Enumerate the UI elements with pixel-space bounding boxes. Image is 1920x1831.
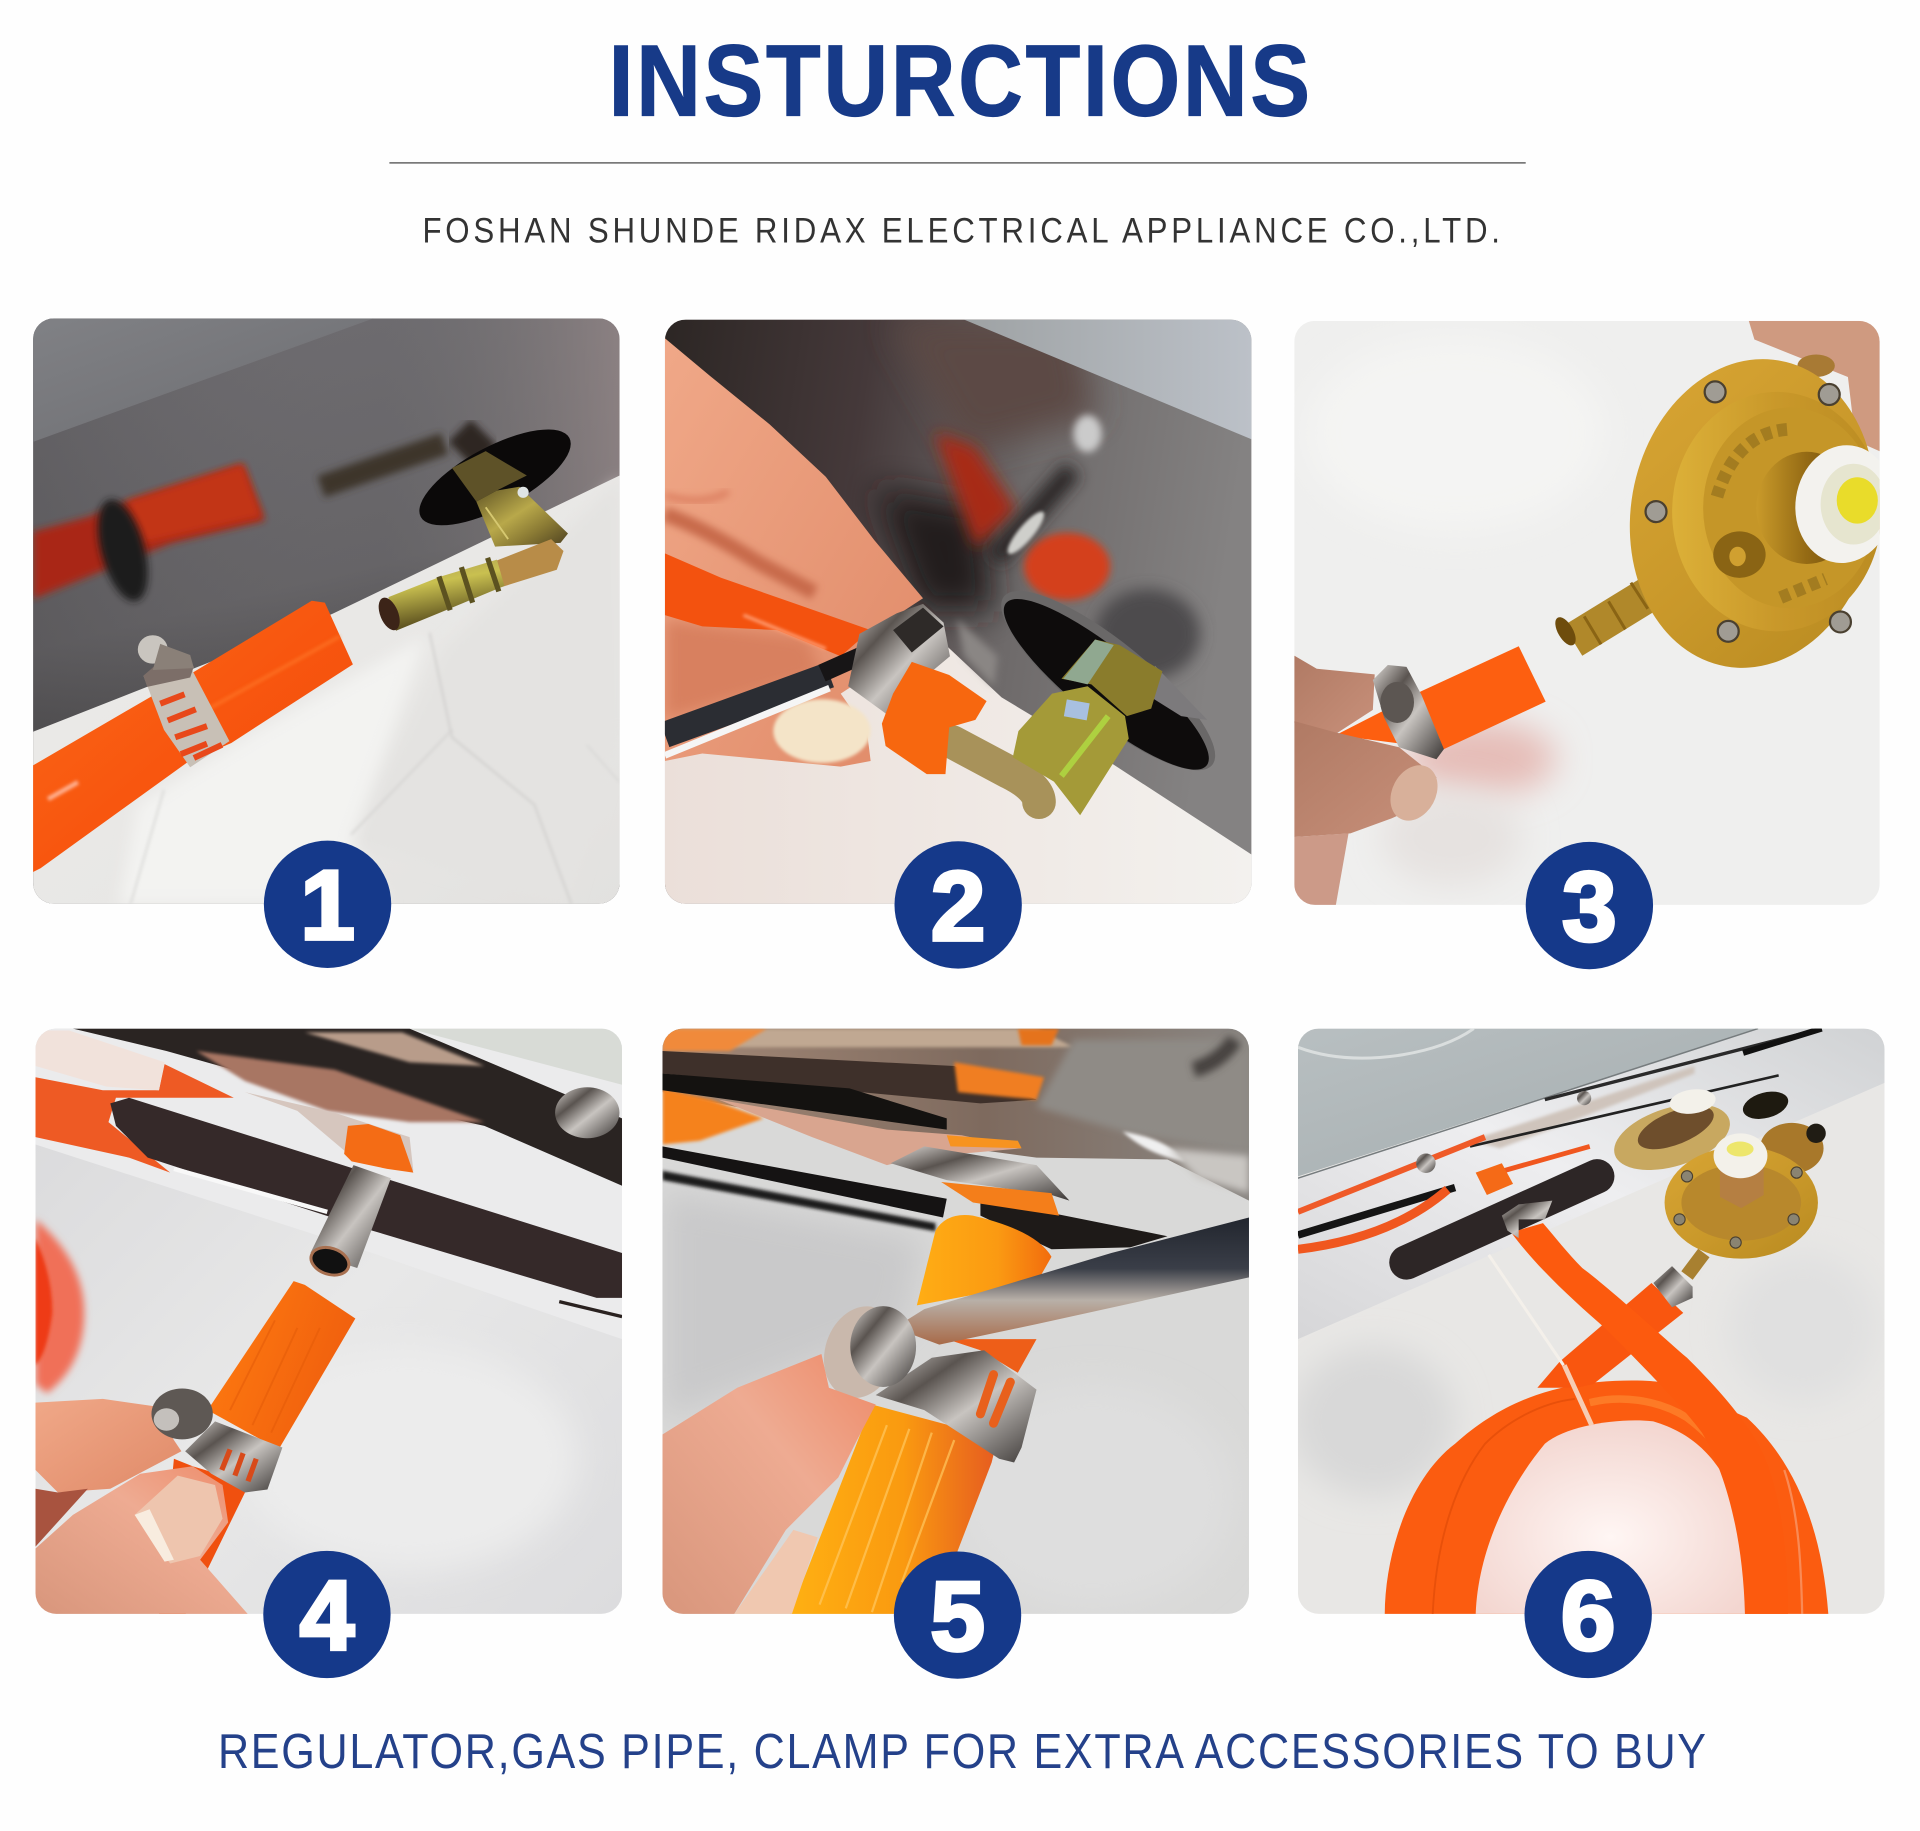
metal pipe xyxy=(307,1165,391,1280)
badge: number 5: 5 xyxy=(930,1561,985,1671)
regulator white cap xyxy=(1788,439,1901,569)
panel: step 2 photo xyxy=(665,320,1251,906)
hose upper xyxy=(917,1215,1051,1305)
gold fitting xyxy=(953,639,1162,815)
hose lower xyxy=(790,1405,996,1615)
badge: number 4: 4 xyxy=(300,1560,354,1670)
cooktop xyxy=(1298,1029,1758,1176)
orange reflection xyxy=(662,1029,767,1051)
orange reflection xyxy=(36,1064,234,1173)
stainless plate xyxy=(1298,1029,1885,1339)
badge: number 1 xyxy=(264,841,391,968)
plate bolts xyxy=(1416,1154,1436,1173)
regulator flame emblem xyxy=(1713,531,1766,578)
orange cap xyxy=(344,1124,413,1173)
front regulator xyxy=(1665,1123,1826,1259)
hose B xyxy=(1537,1283,1683,1388)
lower hose xyxy=(159,1459,245,1615)
footer note: REGULATOR,GAS PIPE, CLAMP FOR EXTRA ACCESSORIES TO BUY xyxy=(218,1724,1706,1779)
panel: step 4 photo xyxy=(36,1029,622,1615)
title: INSTURCTIONS xyxy=(609,24,1310,138)
badge: number 1: 1 xyxy=(300,850,355,960)
black slot strips xyxy=(662,1146,947,1217)
clamp xyxy=(812,1297,1037,1463)
orange ring left xyxy=(36,1219,84,1393)
orange reflections xyxy=(1298,1137,1485,1212)
hand xyxy=(665,338,923,767)
nozzle xyxy=(1687,1253,1704,1275)
black slot xyxy=(1002,592,1216,770)
badge: number 5 xyxy=(894,1551,1021,1679)
panel: step 1 photo xyxy=(33,318,620,905)
elbow fitting xyxy=(374,451,568,633)
orange hose tip xyxy=(208,1281,355,1449)
badge: number 2: 2 xyxy=(931,851,985,961)
hose A xyxy=(1511,1223,1788,1615)
orange hose xyxy=(665,553,871,656)
panel: step 6 photo xyxy=(1290,1029,1885,1615)
panel: step 3 photo xyxy=(1294,321,1901,907)
clamp xyxy=(151,1388,282,1492)
chrome reflection bands xyxy=(73,1029,622,1186)
hand top right xyxy=(1749,321,1881,452)
hand xyxy=(1294,656,1447,907)
panel: step 5 photo xyxy=(662,1029,1249,1615)
clear zip tie xyxy=(1489,1255,1592,1425)
badge: number 3 xyxy=(1526,842,1653,969)
finger xyxy=(36,1399,181,1492)
cloth surface xyxy=(33,475,620,905)
clamps xyxy=(1502,1201,1693,1307)
small orange cap xyxy=(1476,1163,1513,1195)
clamp xyxy=(1373,665,1444,759)
hand xyxy=(662,1354,876,1615)
coiled hose ring xyxy=(1385,1381,1828,1615)
screwdriver xyxy=(665,643,889,755)
company subtitle: FOSHAN SHUNDE RIDAX ELECTRICAL APPLIANCE CO.,LTD. xyxy=(422,212,1500,251)
regulator embossed band xyxy=(1717,429,1788,497)
hose clamp xyxy=(138,635,229,767)
badge: number 4 xyxy=(263,1551,391,1678)
regulator xyxy=(1551,339,1901,687)
black slot xyxy=(1406,1176,1597,1262)
clamp xyxy=(848,604,950,716)
stainless plate xyxy=(36,1029,622,1339)
screwdriver xyxy=(894,1217,1249,1345)
chrome swoosh xyxy=(1123,1131,1186,1161)
regulator bolts xyxy=(1646,381,1851,642)
orange cap xyxy=(882,662,987,774)
black slot xyxy=(419,430,571,526)
badge: number 6 xyxy=(1524,1551,1652,1678)
badge: number 6: 6 xyxy=(1561,1560,1615,1670)
dark strips xyxy=(662,1051,1037,1103)
plate screw xyxy=(555,1087,619,1138)
hose segment under driver xyxy=(947,1339,1037,1373)
black slot xyxy=(110,1098,622,1298)
cloth surface xyxy=(665,641,1251,906)
badge: number 3: 3 xyxy=(1562,851,1617,961)
reflection of hose xyxy=(33,464,265,599)
orange hose xyxy=(33,601,353,872)
reflection shapes xyxy=(874,488,994,611)
top clamp xyxy=(891,1146,1069,1201)
thumb xyxy=(36,1466,249,1615)
rear regulator xyxy=(1606,1086,1791,1182)
badge: number 2 xyxy=(894,841,1022,969)
reflection of fitting xyxy=(321,444,445,487)
blurred chrome upper xyxy=(662,1029,1249,1201)
orange hose xyxy=(1335,646,1546,749)
